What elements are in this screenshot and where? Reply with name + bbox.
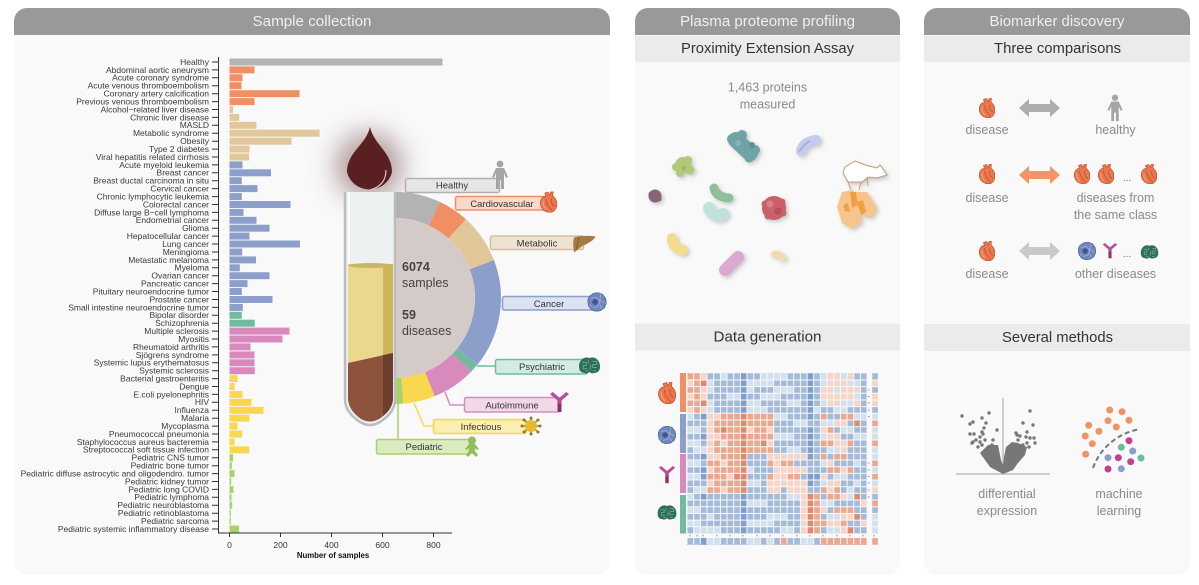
disease labels: Alcohol−related liver disease <box>101 104 209 114</box>
protein: green <box>714 188 729 198</box>
axes and ticks <box>212 57 452 537</box>
disease labels: Colorectal cancer <box>143 199 209 209</box>
label: pediatric <box>376 436 479 457</box>
disease labels: MASLD <box>180 120 209 130</box>
disease labels: Pediatric kidney tumor <box>125 476 209 486</box>
disease labels: Pediatric CNS tumor <box>132 453 209 463</box>
disease labels: Ovarian cancer <box>151 271 209 281</box>
disease labels: Pediatric lymphoma <box>134 492 209 502</box>
label: cardiovascular <box>456 192 557 212</box>
label: cancer: Cancer <box>534 299 564 310</box>
disease labels: Acute coronary syndrome <box>112 73 209 83</box>
label: cardiovascular: Cardiovascular <box>470 199 534 210</box>
proteins measured text <box>728 80 807 112</box>
disease labels: Breast cancer <box>157 168 209 178</box>
x axis tick labels: 200 <box>273 540 288 550</box>
disease labels: HIV <box>195 397 209 407</box>
disease labels: Pediatric neuroblastoma <box>117 500 209 510</box>
disease labels: Pancreatic cancer <box>141 278 209 288</box>
disease labels: Endometrial cancer <box>136 215 209 225</box>
inner half disc with totals: 59 <box>402 308 416 322</box>
disease labels: Pituitary neuroendocrine tumor <box>93 286 209 296</box>
label: autoimmune: Autoimmune <box>485 400 539 411</box>
protein illustrations <box>648 130 887 270</box>
disease labels: Pediatric long COVID <box>128 484 209 494</box>
disease labels: Acute venous thromboembolism <box>88 81 209 91</box>
subheading: three comparisons: Three comparisons <box>994 40 1121 57</box>
grid lines <box>686 373 880 544</box>
icon: cancer cell <box>658 426 676 444</box>
disease labels: Healthy <box>180 57 210 67</box>
text: differential expression <box>977 487 1037 518</box>
disease labels: Pediatric retinoblastoma <box>118 508 209 518</box>
disease labels: Streptococcal soft tissue infection <box>83 445 209 455</box>
inner half disc with totals: diseases <box>402 324 451 338</box>
panel: plasma proteome profiling <box>635 8 900 575</box>
comparison: disease vs other diseases: disease <box>965 267 1009 281</box>
panel: biomarker discovery <box>924 8 1190 575</box>
label: metabolic <box>490 236 596 252</box>
label: healthy: Healthy <box>436 180 468 192</box>
disease labels: E.coli pyelonephritis <box>133 389 209 399</box>
bars: pediatric <box>230 454 239 532</box>
disease labels: Hepatocellular cancer <box>127 231 209 241</box>
disease labels: Sjögrens syndrome <box>136 350 209 360</box>
label: healthy <box>406 161 508 192</box>
x axis tick labels: 400 <box>324 540 339 550</box>
heading: plasma proteome profiling <box>635 8 900 35</box>
x axis tick labels: 800 <box>426 540 441 550</box>
comparison: disease vs healthy: healthy <box>1095 123 1136 137</box>
machine learning scatter <box>1082 406 1144 472</box>
bars: metabolic <box>230 106 320 160</box>
text: differential expression: expression <box>977 504 1037 518</box>
bars: infectious <box>230 375 264 453</box>
subheading: several methods: Several methods <box>1002 329 1113 346</box>
comparison: disease vs same class <box>965 164 1157 222</box>
comparison: disease vs other diseases: other diseases <box>1075 267 1156 281</box>
x axis tick labels: 0 <box>227 540 232 550</box>
disease labels: Pediatric diffuse astrocytic and oligodendro. tumor <box>21 468 209 478</box>
disease labels: Cervical cancer <box>150 184 209 194</box>
disease labels <box>21 57 210 534</box>
disease labels: Dengue <box>179 381 209 391</box>
disease labels: Staphylococcus aureus bacteremia <box>77 437 209 447</box>
disease labels: Bipolar disorder <box>149 310 209 320</box>
row and column tick marks <box>690 390 874 536</box>
protein: plum <box>648 190 662 202</box>
group colour bars <box>680 373 686 534</box>
disease labels: Type 2 diabetes <box>149 144 209 154</box>
text: machine learning <box>1095 487 1143 518</box>
bars: cardiovascular <box>230 66 300 105</box>
icon: antibody <box>659 466 675 483</box>
disease labels: Coronary artery calcification <box>104 89 209 99</box>
comparison: disease vs same class: ... <box>1123 173 1131 184</box>
disease labels: Pediatric sarcoma <box>141 516 209 526</box>
heading: plasma proteome profiling: Plasma proteome profiling <box>680 14 855 30</box>
text: machine learning: learning <box>1097 504 1141 518</box>
heatmap <box>686 373 880 545</box>
comparison: disease vs healthy: disease <box>965 123 1009 137</box>
volcano plot <box>956 398 1050 474</box>
bars: cancer <box>230 161 300 311</box>
label: psychiatric <box>496 357 600 374</box>
bar chart: number of samples per disease <box>21 57 452 560</box>
label: pediatric: Pediatric <box>406 442 443 453</box>
protein: orange complex <box>837 161 887 229</box>
disease labels: Metabolic syndrome <box>133 128 209 138</box>
x axis title: Number of samples <box>297 551 370 560</box>
disease labels: Influenza <box>174 405 209 415</box>
disease labels: Glioma <box>182 223 209 233</box>
label: metabolic: Metabolic <box>517 238 558 250</box>
icon: brain <box>658 505 676 520</box>
text: machine learning: machine <box>1095 487 1143 501</box>
x axis tick labels: 600 <box>375 540 390 550</box>
disease labels: Diffuse large B−cell lymphoma <box>94 207 209 217</box>
heading: sample collection <box>14 8 610 35</box>
inner half disc with totals: samples <box>402 276 449 290</box>
blood sample diagram <box>335 127 606 457</box>
icon: heart <box>658 383 676 404</box>
disease labels: Breast ductal carcinoma in situ <box>93 176 209 186</box>
heading: sample collection: Sample collection <box>252 14 372 30</box>
disease labels: Bacterial gastroenteritis <box>120 374 209 384</box>
disease labels: Systemic sclerosis <box>139 366 209 376</box>
inner half disc with totals <box>395 218 475 378</box>
disease labels: Chronic lymphocytic leukemia <box>97 192 209 202</box>
subheading: data generation: Data generation <box>714 328 822 346</box>
inner half disc with totals: 6074 <box>402 260 430 274</box>
label: infectious: Infectious <box>461 422 502 433</box>
disease labels: Pediatric bone tumor <box>131 461 209 471</box>
disease labels: Abdominal aortic aneurysm <box>106 65 209 75</box>
disease labels: Mycoplasma <box>161 421 209 431</box>
disease labels: Schizophrenia <box>155 318 209 328</box>
protein: mint <box>709 208 723 215</box>
subheading: several methods <box>924 324 1190 351</box>
label: cancer <box>502 292 606 312</box>
ring chart by disease class <box>395 205 488 391</box>
panel: sample collection <box>14 8 610 575</box>
disease labels: Acute myeloid leukemia <box>119 160 209 170</box>
disease labels: Meningioma <box>163 247 209 257</box>
disease labels: Viral hepatitis related cirrhosis <box>96 152 209 162</box>
proteins measured text: 1,463 proteins <box>728 80 807 94</box>
protein: olive <box>672 156 694 177</box>
disease labels: Pediatric systemic inflammatory disease <box>58 524 209 534</box>
disease labels: Small intestine neuroendocrine tumor <box>68 302 209 312</box>
disease labels: Chronic liver disease <box>130 112 209 122</box>
heading: biomarker discovery <box>924 8 1190 35</box>
protein: periwinkle <box>799 140 816 152</box>
label: infectious <box>434 416 542 436</box>
heading: biomarker discovery: Biomarker discovery <box>990 14 1125 30</box>
comparison: disease vs same class: disease <box>965 191 1009 205</box>
glow behind blood drop <box>335 132 403 200</box>
comparison: disease vs same class: diseases from <box>1077 191 1154 205</box>
blood drop <box>347 127 392 190</box>
disease labels: Prostate cancer <box>149 294 209 304</box>
comparison: disease vs healthy <box>965 95 1136 137</box>
comparison: disease vs other diseases <box>965 242 1158 281</box>
protein: tan <box>774 254 783 258</box>
comparison: disease vs other diseases: ... <box>1123 249 1131 260</box>
disease labels: Myositis <box>178 334 209 344</box>
protein: red <box>762 196 786 220</box>
disease labels: Lung cancer <box>162 239 209 249</box>
protein: yellow <box>672 238 683 250</box>
disease labels: Systemic lupus erythematosus <box>94 358 209 368</box>
connector lines <box>398 366 495 439</box>
comparison: disease vs same class: the same class <box>1074 208 1157 222</box>
disease labels: Malaria <box>181 413 209 423</box>
subheading: proximity extension assay: Proximity Extension Assay <box>681 40 854 57</box>
text: differential expression: differential <box>978 487 1036 501</box>
bars: psychiatric <box>230 312 255 327</box>
protein: teal <box>727 130 760 162</box>
disease labels: Previous venous thromboembolism <box>76 96 209 106</box>
x axis tick labels <box>227 540 441 550</box>
disease labels: Metastatic melanoma <box>128 255 209 265</box>
disease labels: Pneumococcal pneumonia <box>109 429 209 439</box>
label: psychiatric: Psychiatric <box>519 362 565 373</box>
disease labels: Myeloma <box>175 263 209 273</box>
subheading: proximity extension assay <box>635 36 900 62</box>
bars: healthy <box>230 58 442 66</box>
label: autoimmune <box>464 392 569 412</box>
protein: pink <box>725 257 738 270</box>
disease labels: Multiple sclerosis <box>144 326 209 336</box>
side icons for heatmap groups <box>658 383 676 520</box>
proteins measured text: measured <box>740 98 795 112</box>
subheading: three comparisons <box>924 36 1190 62</box>
disease labels: Rheumatoid arthritis <box>133 342 209 352</box>
bars: autoimmune <box>230 328 290 374</box>
disease labels: Obesity <box>180 136 210 146</box>
blood tube <box>345 192 395 425</box>
subheading: data generation <box>635 324 900 350</box>
